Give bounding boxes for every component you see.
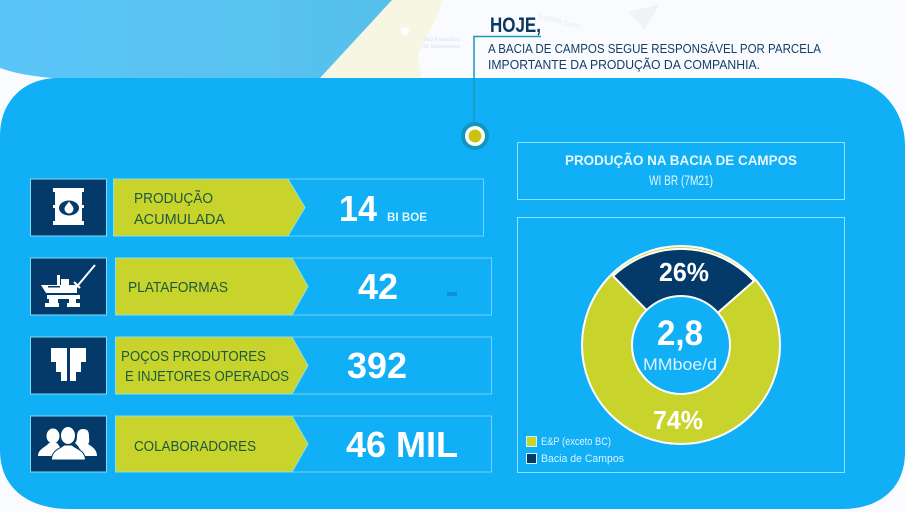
icon: oil barrel: [30, 179, 106, 236]
value: 14: [339, 188, 377, 229]
row: plataformas: [30, 258, 492, 315]
segment: Bacia de Campos 26%: [613, 249, 754, 345]
label: ACUMULADA: [134, 211, 225, 228]
row: produção acumulada: [30, 179, 484, 236]
label: E INJETORES OPERADOS: [125, 368, 289, 385]
value: 392: [347, 345, 407, 386]
callout heading: [474, 14, 822, 125]
icon: oil platform: [30, 258, 106, 315]
value box: [116, 337, 492, 394]
green label arrow: [116, 337, 308, 394]
label: POÇOS PRODUTORES: [121, 348, 266, 365]
map background: [320, 0, 660, 78]
map background: Espírito Santo: [538, 13, 582, 31]
donut chart panel: [518, 218, 844, 472]
legend item: E&P: E&P (exceto BC): [541, 436, 611, 448]
value box: [116, 416, 492, 472]
center value: 2,8: [657, 314, 703, 353]
map background: São Francisco: [423, 37, 461, 43]
row: poços: [30, 337, 492, 394]
callout title: HOJE,: [490, 14, 541, 37]
donut chart: [582, 246, 780, 444]
chart title box: [518, 142, 844, 200]
label: COLABORADORES: [134, 438, 256, 455]
callout connector line: [474, 36, 541, 125]
legend: [526, 436, 624, 465]
callout text: A BACIA DE CAMPOS SEGUE RESPONSÁVEL POR PARCELA: [488, 41, 822, 56]
chart title: PRODUÇÃO NA BACIA DE CAMPOS: [565, 153, 797, 168]
label: PRODUÇÃO: [134, 190, 213, 207]
callout text: IMPORTANTE DA PRODUÇÃO DA COMPANHIA.: [488, 58, 760, 72]
unit: BI BOE: [387, 210, 427, 224]
value 26%: 26%: [659, 257, 709, 287]
light blue corner shape: [0, 0, 392, 78]
map background: de Itabapoana: [423, 44, 461, 50]
value box: [116, 258, 492, 315]
marker dot: [461, 122, 489, 150]
row: colaboradores: [30, 416, 492, 472]
value box: [114, 179, 484, 236]
icon: people: [30, 416, 106, 472]
value: 46 MIL: [346, 424, 458, 465]
legend item: Bacia de Campos: Bacia de Campos: [541, 453, 624, 465]
green label arrow: [116, 416, 308, 472]
label: PLATAFORMAS: [128, 279, 228, 296]
donut hole: [632, 296, 730, 394]
green label arrow: [116, 258, 308, 315]
value 74%: 74%: [653, 405, 703, 435]
segment: E&P 74%: [582, 246, 780, 444]
small dash mark: [447, 292, 457, 296]
value: 42: [358, 266, 398, 307]
chart subtitle: WI BR (7M21): [649, 173, 713, 188]
center unit: MMboe/d: [643, 355, 717, 374]
icon: wells: [30, 337, 106, 394]
green label arrow: [114, 179, 305, 236]
